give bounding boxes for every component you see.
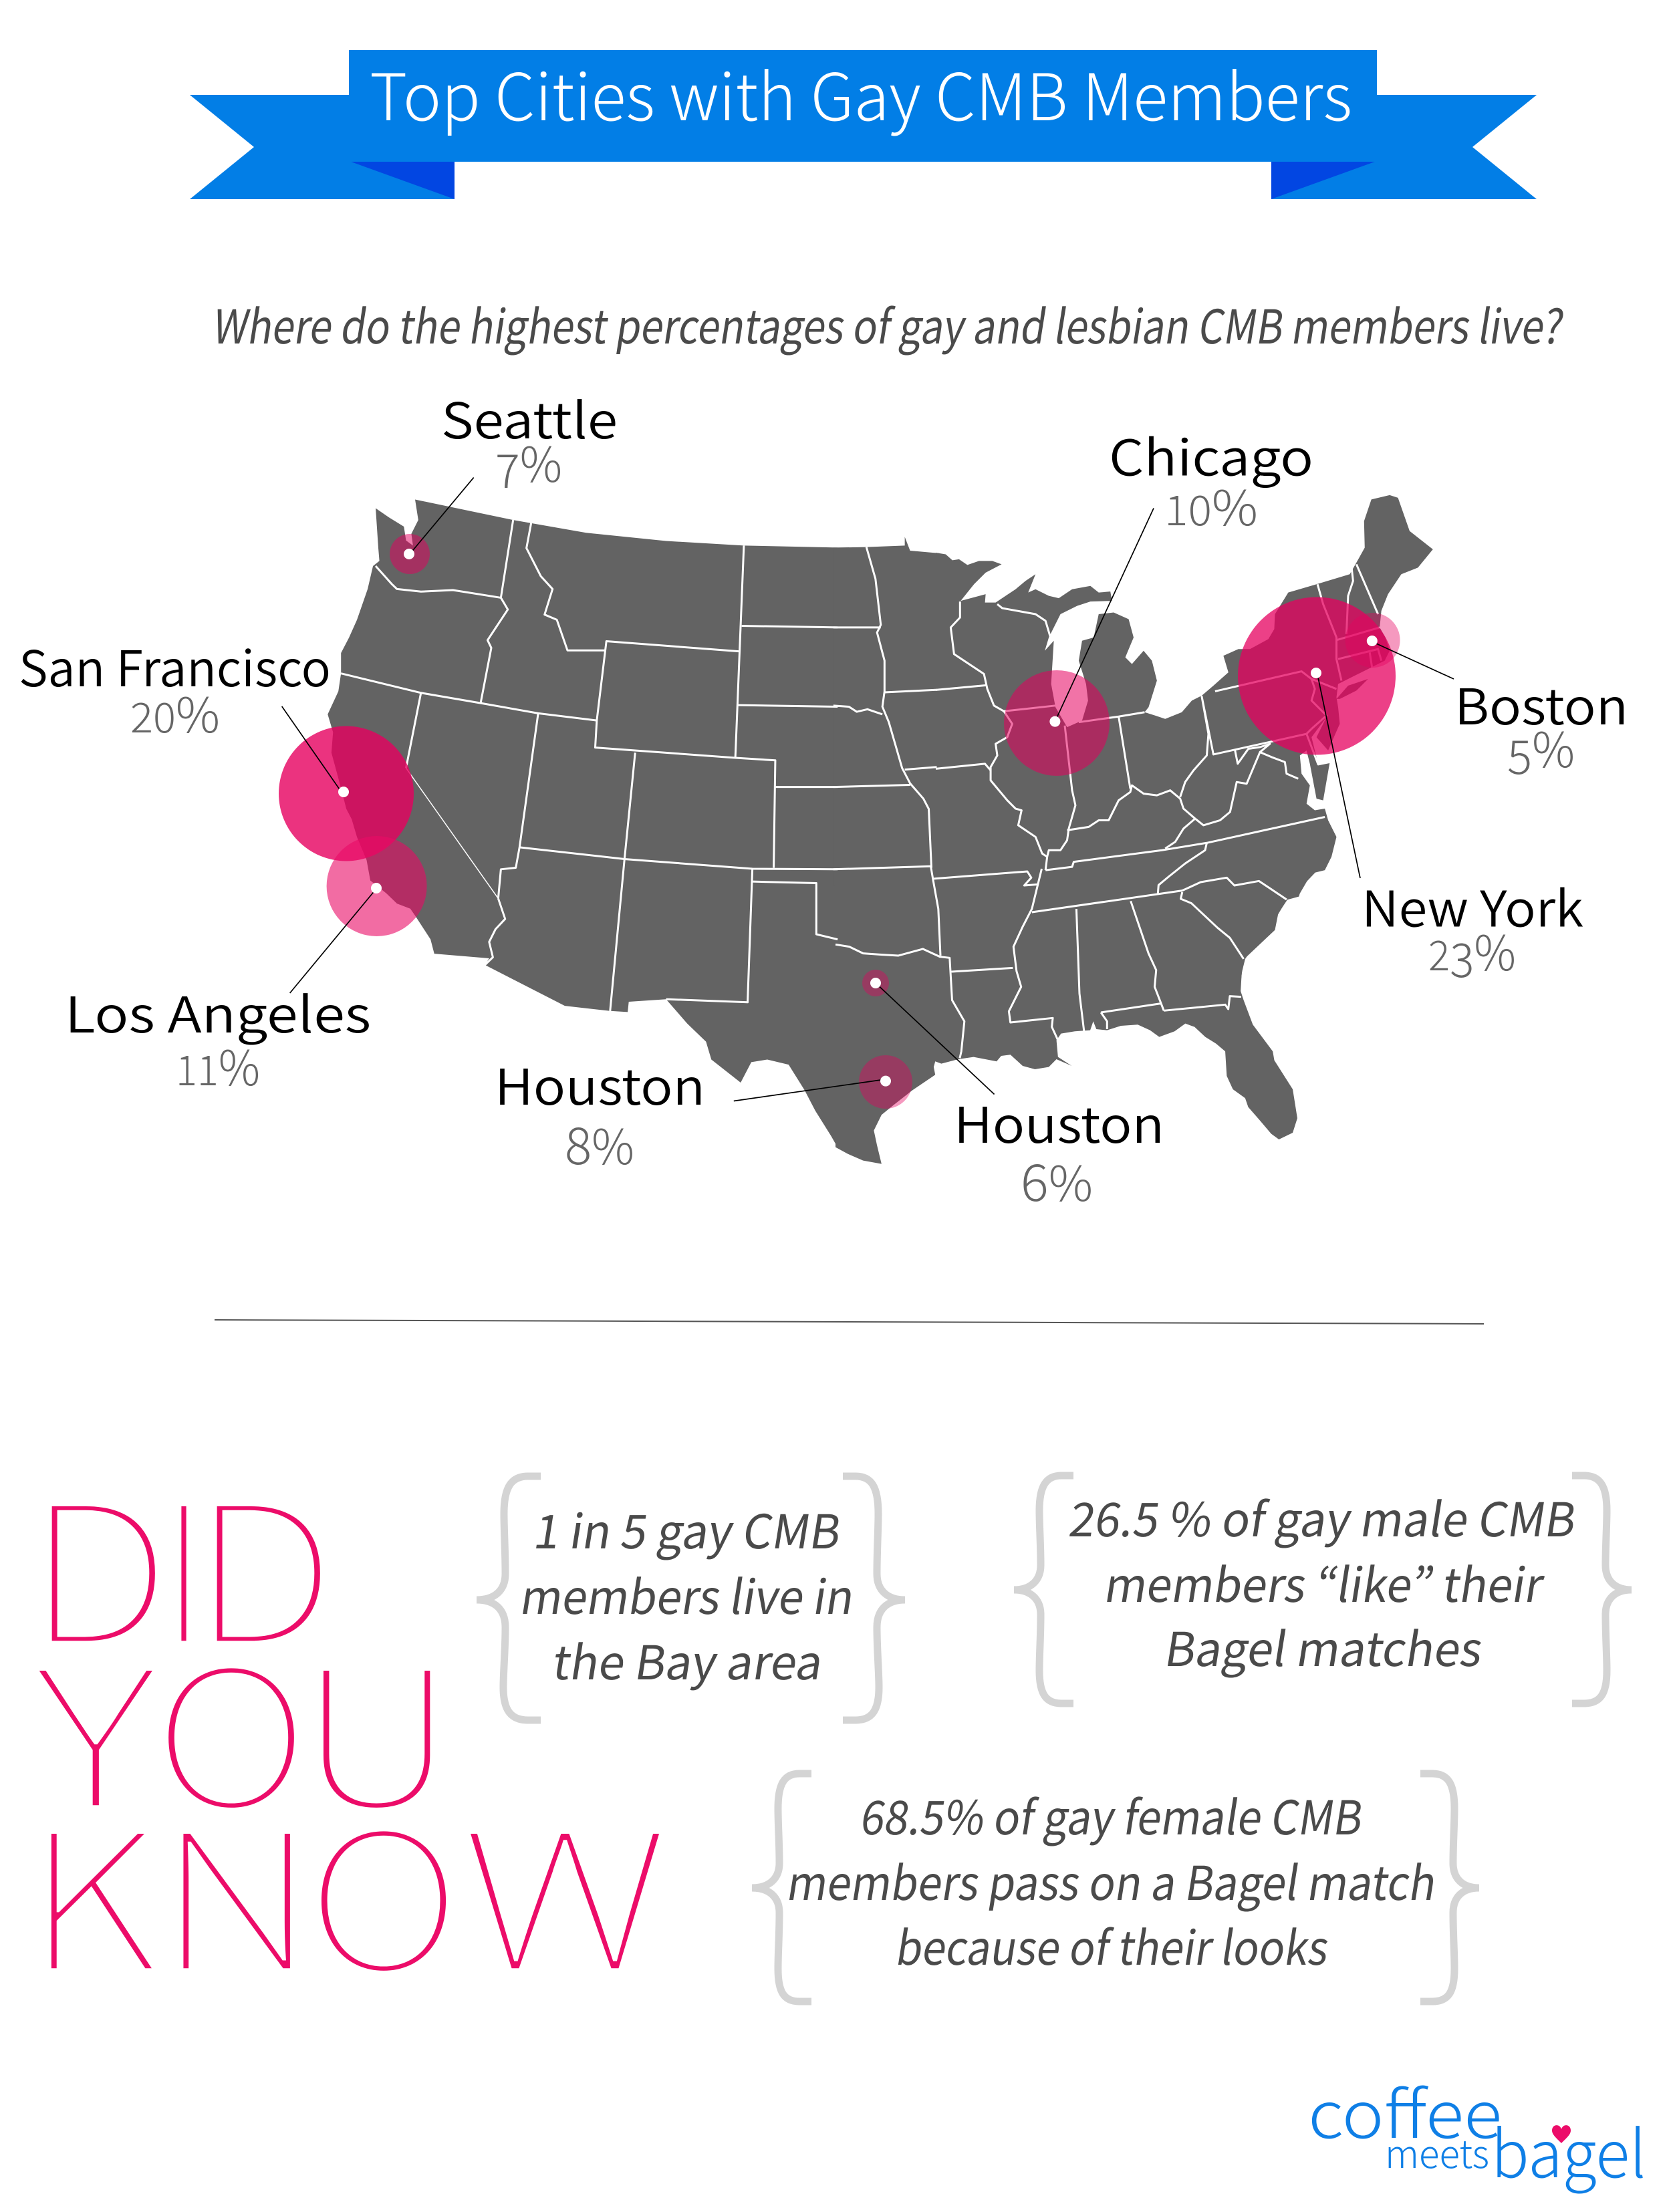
label: Houston 6%: Houston bbox=[954, 1086, 1164, 1157]
leader lines bbox=[282, 478, 1454, 1101]
label: Chicago bbox=[1109, 418, 1313, 539]
label: Los Angeles: Los Angeles bbox=[65, 976, 371, 1047]
heading: Did You Know: N bbox=[156, 1752, 317, 2024]
city bubble: Los Angeles bbox=[327, 836, 427, 936]
heading: Did You Know: O bbox=[154, 1588, 309, 1861]
label: Chicago: 10% bbox=[1164, 469, 1258, 539]
heading: Did You Know bbox=[27, 1424, 670, 2024]
label: Seattle: Seattle bbox=[441, 382, 618, 453]
label: New York: New York bbox=[1362, 870, 1583, 941]
label: Houston 6% bbox=[954, 1086, 1164, 1216]
US map bbox=[328, 495, 1433, 1164]
heading: Did You Know: D bbox=[192, 1424, 335, 1697]
heading: Did You Know: K bbox=[27, 1752, 157, 2024]
label: Boston: Boston bbox=[1454, 668, 1628, 739]
label: New York: % bbox=[1474, 914, 1516, 984]
heading: Did You Know: W bbox=[461, 1752, 670, 2024]
label: Los Angeles: 11% bbox=[176, 1029, 260, 1099]
fact: 68.5 percent: members pass on a Bagel match bbox=[783, 1846, 1442, 1914]
label: Chicago: Chicago bbox=[1109, 418, 1313, 491]
label: Houston 8%: Houston bbox=[495, 1048, 705, 1119]
label: San Francisco: San Francisco bbox=[19, 630, 331, 701]
fact: 26.5 percent: 26.5 % of gay male CMB bbox=[1065, 1483, 1582, 1550]
fact: 1 in 5: 1 in 5 gay CMB bbox=[530, 1495, 847, 1562]
fact: 1 in 5: members live in bbox=[517, 1560, 860, 1628]
logo: coffee meets bagel bbox=[1308, 2062, 1646, 2196]
fact: 26.5 percent: Bagel matches bbox=[1161, 1613, 1489, 1680]
city bubble: Houston bbox=[859, 1055, 912, 1109]
label: San Francisco: 20% bbox=[130, 676, 220, 746]
label: New York bbox=[1362, 870, 1583, 991]
fact: 1 in 5: the Bay area bbox=[549, 1626, 829, 1693]
label: Houston 8%: 8% bbox=[565, 1105, 634, 1179]
fact: 26.5 percent bbox=[1014, 1476, 1632, 1703]
city markers bbox=[338, 549, 1378, 1087]
fact: 68.5 percent: 68.5% of gay female CMB bbox=[857, 1781, 1369, 1848]
heading: Did You Know: I bbox=[158, 1424, 209, 1697]
label: Seattle: % bbox=[520, 426, 562, 496]
fact: 68.5 percent bbox=[752, 1774, 1479, 2001]
city bubble: Dallas location labelled Houston bbox=[862, 970, 889, 996]
city bubble: Chicago bbox=[1004, 670, 1110, 776]
logo: coffee meets bagel: bagel bbox=[1491, 2102, 1646, 2196]
label: New York: 3 bbox=[1450, 924, 1474, 991]
label: Los Angeles bbox=[65, 976, 371, 1099]
heading: Did You Know: U bbox=[297, 1588, 456, 1861]
label: Boston: % bbox=[1532, 711, 1575, 781]
label: San Francisco bbox=[19, 630, 331, 746]
logo: coffee meets bagel: meets bbox=[1385, 2123, 1489, 2179]
title banner bbox=[190, 45, 1537, 199]
label: Boston bbox=[1454, 668, 1628, 788]
city bubble: Boston bbox=[1345, 613, 1400, 668]
heading: Did You Know: O bbox=[307, 1752, 461, 2024]
logo: coffee meets bagel: coffee bbox=[1308, 2062, 1502, 2157]
fact: 68.5 percent: because of their looks bbox=[892, 1911, 1335, 1979]
fact: 26.5 percent: members “like” their bbox=[1101, 1548, 1549, 1616]
heading: Did You Know: Y bbox=[36, 1588, 156, 1861]
label: New York: 2 bbox=[1428, 922, 1450, 982]
label: Seattle bbox=[441, 382, 618, 502]
label: Houston 6%: 6% bbox=[1021, 1142, 1093, 1216]
label: Houston 8% bbox=[495, 1048, 705, 1179]
label: Seattle: 7 bbox=[495, 434, 520, 502]
heading: Did You Know: D bbox=[27, 1424, 170, 1697]
city bubble: San Francisco bbox=[279, 726, 414, 861]
fact: 1 in 5 bbox=[477, 1476, 905, 1720]
label: Boston: 5 bbox=[1507, 720, 1532, 788]
title: Top Cities with Gay CMB Members bbox=[370, 45, 1352, 139]
city bubble: New York bbox=[1238, 597, 1396, 755]
city bubble: Seattle bbox=[390, 534, 430, 574]
icon: heart bbox=[1552, 2125, 1571, 2143]
